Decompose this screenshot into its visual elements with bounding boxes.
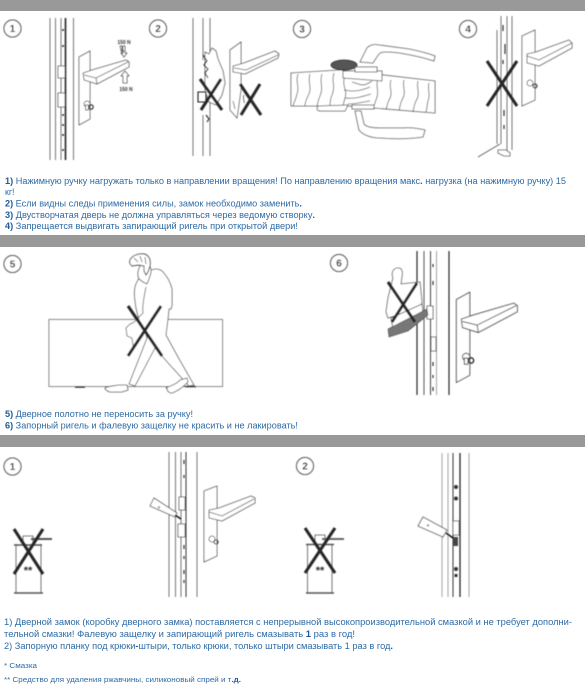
instructions 5-6: 5) Дверное полотно не переносить за ручку! <box>5 409 193 419</box>
force arrow down: 150 N <box>117 40 131 46</box>
number badge 4 <box>460 20 476 38</box>
footnotes: * Смазка <box>4 663 37 670</box>
instructions 1-4 <box>5 176 566 231</box>
panel 6: do not paint bolt <box>330 251 517 395</box>
upper handle <box>360 45 435 63</box>
background bar: top <box>0 0 585 11</box>
instructions 1-4: 4) Запрещается выдвигать запирающий ригель при открытой двери! <box>5 221 298 231</box>
background bar: lower <box>0 435 585 447</box>
number badge 6 <box>330 254 348 272</box>
wood section <box>291 60 435 113</box>
cross mark <box>388 282 417 322</box>
instructions lubrication: тельной смазки! Фалевую защелку и запирающий ригель смазывать 1 раз в год! <box>4 629 355 639</box>
panel 8: lubricate strike plate <box>296 453 469 597</box>
panel 3: double door handle and wood section <box>291 20 435 139</box>
instructions 1-4: 3) Двустворчатая дверь не должна управляться через ведомую створку . <box>5 210 315 220</box>
spray can: ** <box>24 565 33 577</box>
brush <box>386 268 428 337</box>
door leaf <box>49 320 222 387</box>
handle and plate <box>522 30 535 106</box>
door edge with lock <box>169 452 197 597</box>
panel 5: do not carry door by handle <box>4 254 222 393</box>
spray can <box>14 536 52 593</box>
spray can <box>306 535 344 593</box>
panel 4: extended bolt when door open <box>460 16 572 157</box>
door edge with strike plate <box>442 453 469 597</box>
door edge with lock <box>417 251 449 395</box>
footnotes <box>4 663 241 684</box>
number badge 2: 2 <box>302 462 308 472</box>
instructions 1-4: 1) Нажимную ручку нагружать только в направлении вращения! По направлению вращения макс . нагрузка (на нажимную ручку) 15 <box>5 176 566 186</box>
cross mark <box>128 306 162 356</box>
cross mark <box>14 529 43 574</box>
force arrow down <box>117 40 131 57</box>
number badge 2: 2 <box>155 24 161 35</box>
lubricant bottle <box>418 517 453 538</box>
number badge 3 <box>294 20 310 38</box>
number badge 1: 1 <box>10 462 16 473</box>
number badge 3: 3 <box>299 24 305 36</box>
lubricant bottle <box>150 498 181 519</box>
instructions 5-6 <box>5 409 298 430</box>
number badge 6: 6 <box>336 258 342 270</box>
spray can: ** <box>316 565 325 577</box>
instructions 1-4: кг! <box>5 187 15 197</box>
panel 2: damaged lock <box>150 18 279 156</box>
handle and plate <box>456 292 517 382</box>
handle and plate <box>230 42 241 118</box>
instructions lubrication: 1) Дверной замок (коробку дверного замка) поставляется с непрерывной высокопроизводительной смазкой и не требует дополни- <box>4 617 572 627</box>
number badge 5 <box>4 256 21 272</box>
number badge 2 <box>296 458 314 474</box>
lubricant bottle: * <box>427 524 430 531</box>
panel 1: handle load limit <box>4 18 133 160</box>
handle and plate <box>79 51 129 125</box>
lower handle <box>355 111 425 139</box>
footnotes: ** Средство для удаления ржавчины, силиконовый спрей и т .д. <box>4 676 241 684</box>
door edge with damage <box>193 18 225 156</box>
door edge with lock <box>50 18 74 160</box>
cross mark <box>305 528 335 573</box>
cross mark <box>487 61 517 106</box>
force arrow up <box>119 71 133 93</box>
instructions lubrication <box>4 617 572 651</box>
instructions 5-6: 6) Запорный ригель и фалевую защелку не красить и не лакировать! <box>5 420 298 430</box>
number badge 4: 4 <box>465 24 471 36</box>
cross mark <box>200 79 222 110</box>
number badge 1 <box>4 458 21 475</box>
instructions lubrication: 2) Запорную планку под крюки -штыри, только крюки, только штыри смазывать 1 раз в год . <box>4 641 393 651</box>
handle and plate <box>204 486 217 562</box>
background bar: middle <box>0 235 585 247</box>
door edge and floor <box>478 16 512 157</box>
force arrow up: 150 N <box>119 87 133 93</box>
person carrying door <box>105 254 194 393</box>
cross mark <box>240 84 261 115</box>
number badge 5: 5 <box>10 260 16 270</box>
lubricant bottle: * <box>158 506 161 513</box>
instructions 1-4: 2) Если видны следы применения силы, замок необходимо заменить . <box>5 198 302 208</box>
number badge 1 <box>4 20 21 37</box>
panel 7: lubricate lock <box>4 452 255 597</box>
number badge 1: 1 <box>10 24 16 35</box>
